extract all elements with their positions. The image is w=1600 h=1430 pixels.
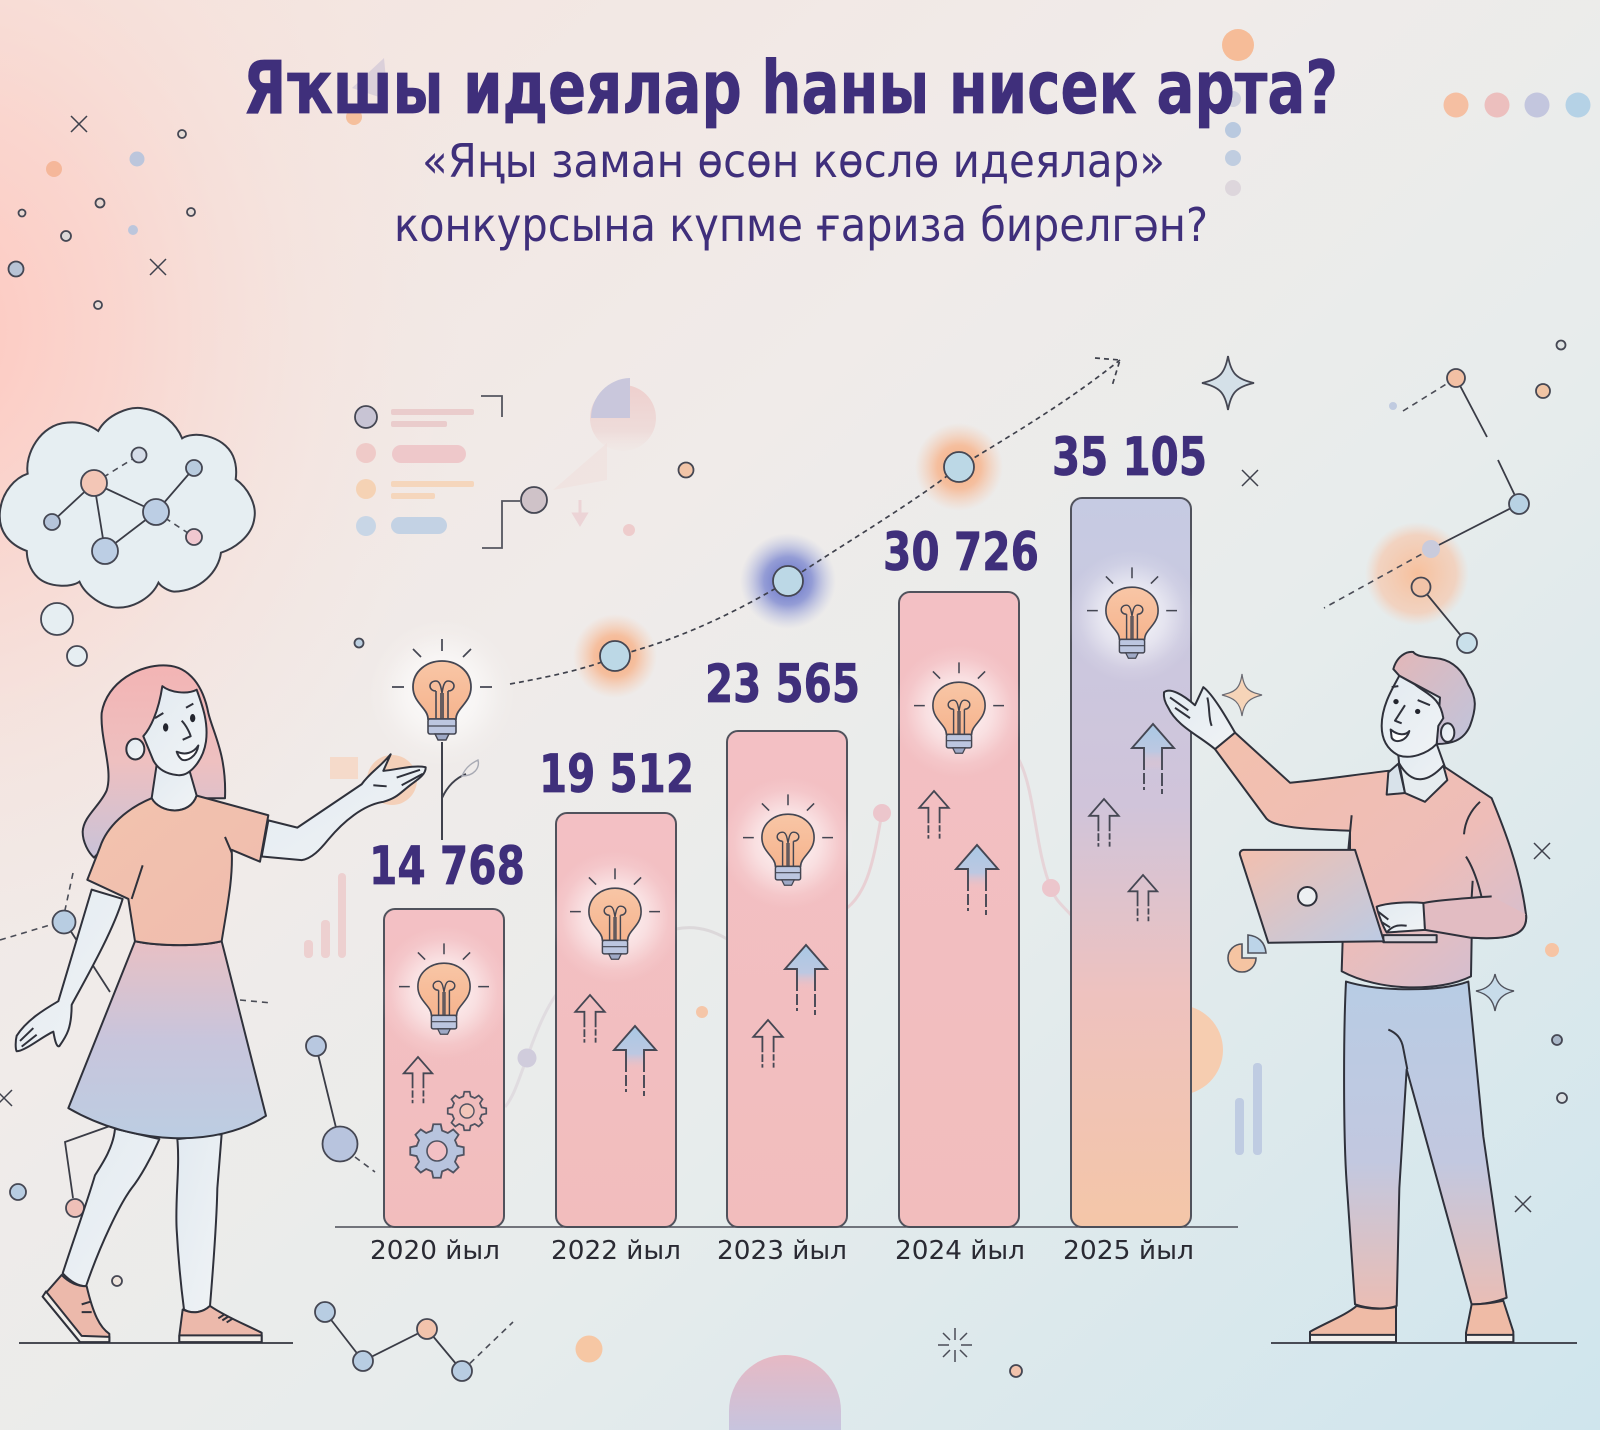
bar: 2023 bbox=[721, 731, 855, 1227]
year labels: 2022 йыл bbox=[551, 1236, 681, 1266]
woman illustration bbox=[16, 665, 426, 1342]
bar values: 23 565 bbox=[705, 654, 860, 715]
year labels: 2023 йыл bbox=[717, 1236, 847, 1266]
trend line with glowing nodes bbox=[510, 358, 1120, 698]
shirt bbox=[87, 796, 268, 945]
subtitle: конкурсына күпме ғариза бирелгән? bbox=[394, 198, 1208, 252]
faded pie chart bbox=[354, 378, 694, 648]
faded legend bbox=[355, 396, 547, 548]
bar: 2024 bbox=[892, 592, 1026, 1227]
shoes bbox=[1310, 1306, 1396, 1342]
man illustration bbox=[1164, 652, 1526, 1342]
sweater bbox=[1215, 733, 1526, 987]
bar: 2022 bbox=[548, 813, 682, 1227]
left background network bbox=[0, 873, 375, 1286]
chart: bars bbox=[377, 498, 1199, 1227]
faded connector curves bbox=[505, 760, 1223, 1107]
collar bbox=[1387, 764, 1405, 795]
bar values: 30 726 bbox=[883, 522, 1039, 583]
laptop bbox=[1240, 850, 1384, 943]
typing hand bbox=[1377, 902, 1425, 932]
bar: 2020 bbox=[377, 909, 511, 1227]
bar values: 14 768 bbox=[369, 836, 525, 897]
neck bbox=[152, 765, 197, 810]
faded elements behind woman hand bbox=[304, 755, 417, 958]
hair bbox=[1393, 652, 1475, 744]
bottom network chain bbox=[315, 1302, 513, 1381]
neck bbox=[1398, 744, 1445, 798]
ear bbox=[126, 739, 144, 759]
ear bbox=[1441, 723, 1454, 742]
year labels: 2024 йыл bbox=[895, 1236, 1025, 1266]
bar values bbox=[369, 427, 1207, 897]
skirt bbox=[68, 941, 266, 1138]
bottom decorations bbox=[576, 1328, 1022, 1430]
thought cloud with network bbox=[0, 408, 255, 666]
ground line: man bbox=[1271, 1342, 1577, 1344]
year labels bbox=[370, 1236, 1194, 1266]
year labels: 2025 йыл bbox=[1063, 1236, 1194, 1266]
decorative bars and marks right bbox=[1222, 674, 1567, 1212]
year labels: 2020 йыл bbox=[370, 1236, 500, 1266]
raised hand bbox=[1164, 687, 1235, 749]
ground line: woman bbox=[19, 1342, 293, 1344]
decorative dots: top left bbox=[8, 116, 195, 309]
shoes bbox=[43, 1275, 109, 1342]
legs bbox=[63, 1129, 159, 1286]
subtitle: «Яңы заман өсөн көслө идеялар» bbox=[422, 134, 1165, 188]
bar: 2025 bbox=[1065, 498, 1199, 1227]
bar values: 35 105 bbox=[1052, 427, 1207, 488]
keyboard bbox=[1383, 935, 1437, 942]
arm left bbox=[16, 890, 123, 1051]
subtitle bbox=[394, 134, 1208, 252]
face bbox=[1382, 676, 1443, 757]
right network decoration bbox=[1202, 340, 1566, 653]
bulb on stem bbox=[368, 619, 516, 840]
hair bbox=[83, 665, 225, 858]
axis baseline bbox=[335, 1226, 1238, 1228]
decorative dots: top right bbox=[346, 29, 1590, 196]
bar values: 19 512 bbox=[539, 744, 694, 805]
pants bbox=[1344, 982, 1507, 1308]
face bbox=[143, 686, 207, 775]
sleeve bbox=[1423, 896, 1526, 938]
arm right bbox=[262, 754, 426, 860]
